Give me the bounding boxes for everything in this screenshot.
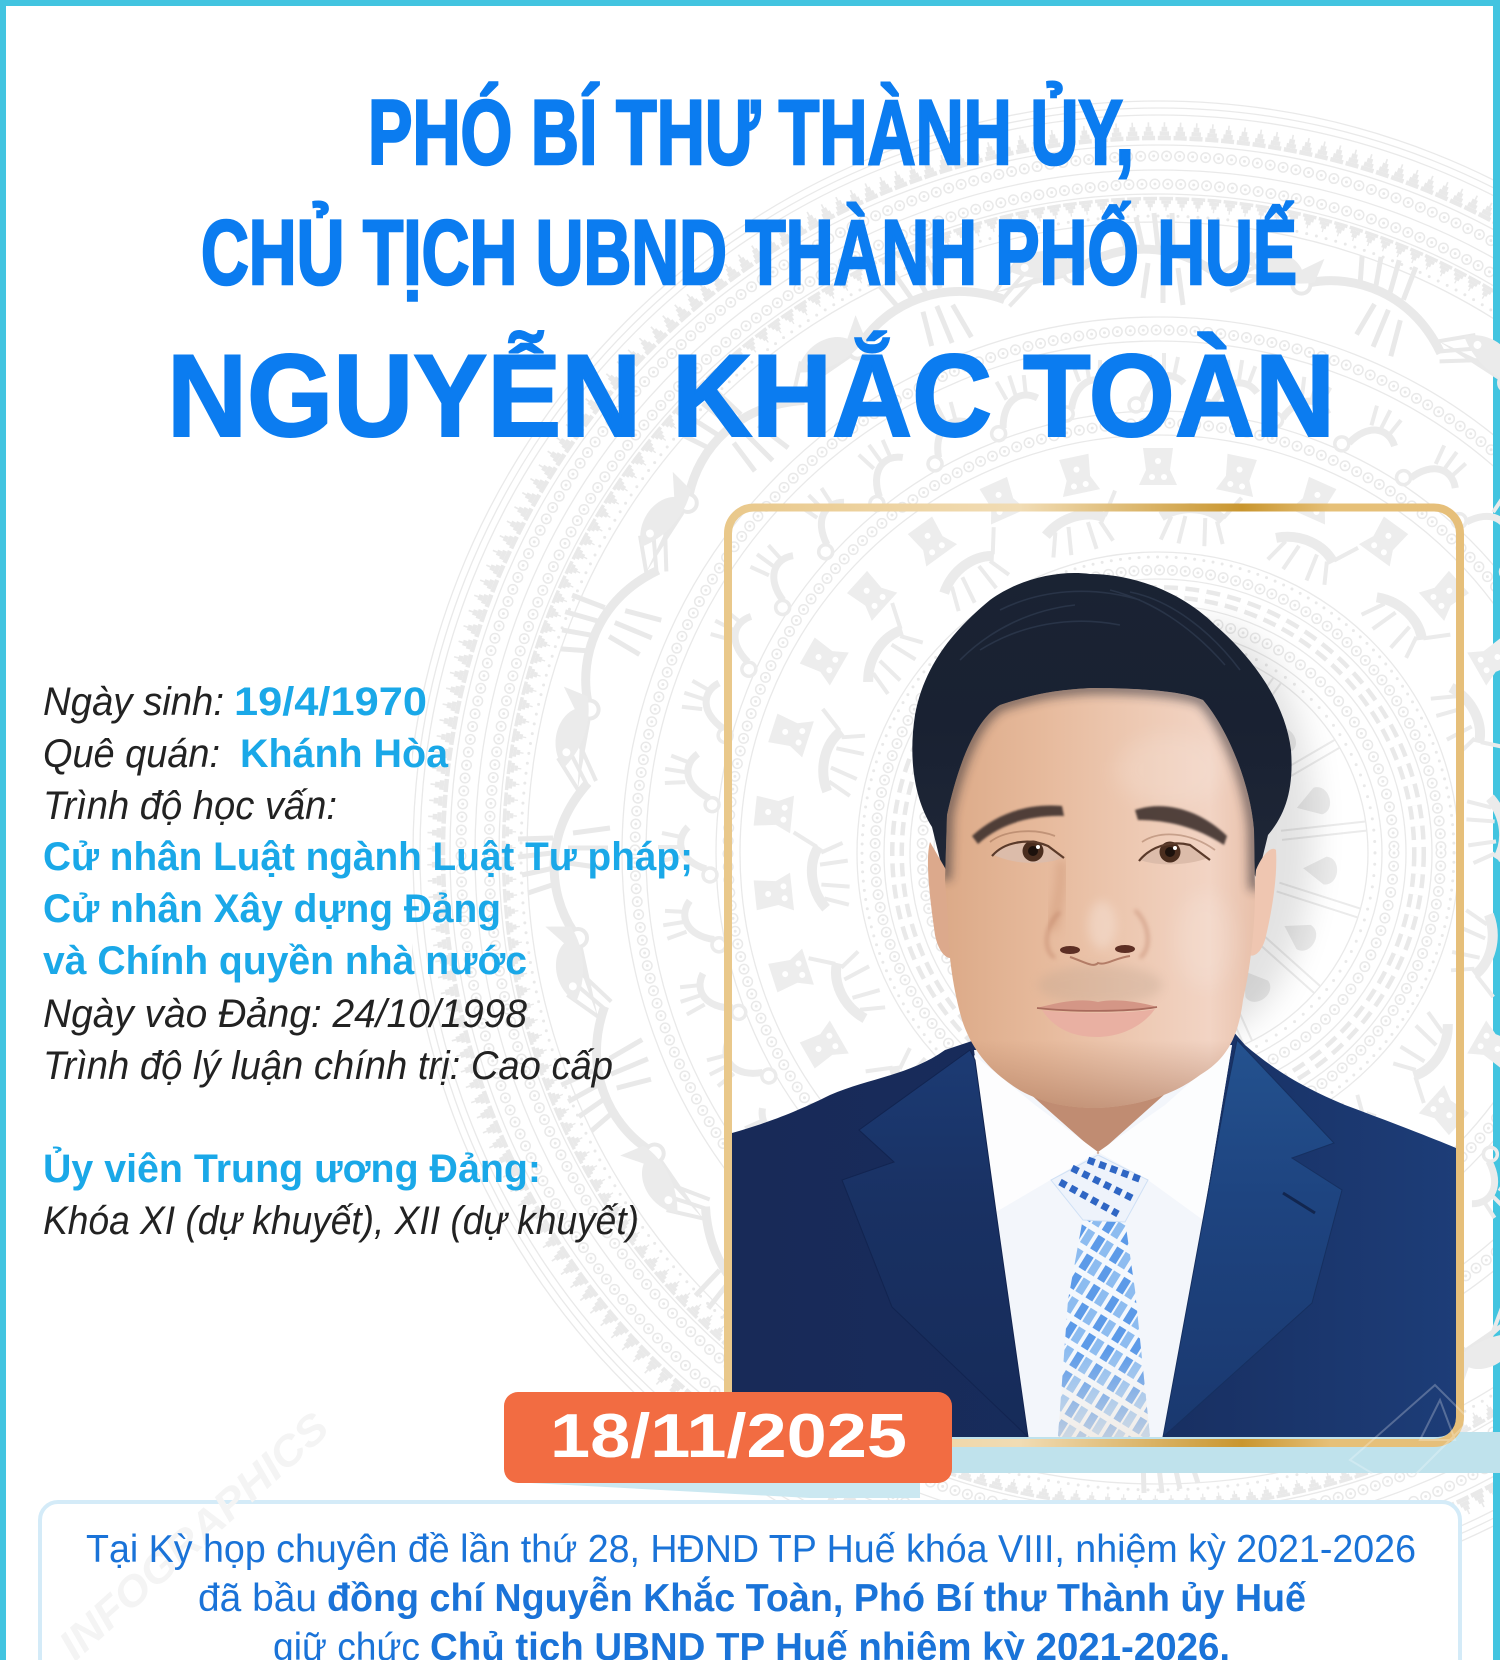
announcement line 2: đã bầu: [198, 1577, 317, 1620]
education degrees: [43, 835, 693, 983]
right lapel: [1163, 1040, 1342, 1437]
education degrees: Cử nhân Xây dựng Đảng: [43, 887, 501, 931]
left ear: [928, 842, 950, 958]
neck: [1033, 1094, 1164, 1154]
education degrees: và Chính quyền nhà nước: [43, 939, 527, 983]
right ear: [1248, 849, 1276, 956]
portrait: [732, 573, 1456, 1437]
central committee terms: Khóa XI (dự khuyết), XII (dự khuyết): [43, 1199, 639, 1243]
information box: [40, 1403, 1460, 1660]
shirt collar left: [974, 1055, 1098, 1212]
nose: [1047, 860, 1148, 965]
badge background: [504, 1392, 952, 1483]
eyebrow left: [972, 806, 1064, 844]
necktie: [1051, 1155, 1150, 1437]
shirt collar right: [1098, 1045, 1232, 1220]
central committee heading: Ủy viên Trung ương Đảng:: [43, 1145, 541, 1191]
face base: [945, 688, 1255, 1108]
title name: NGUYỄN KHẮC TOÀN: [167, 330, 1335, 461]
watermark logo lower right: [1350, 1385, 1470, 1490]
birth date: [43, 680, 427, 724]
date text: 18/11/2025: [550, 1402, 907, 1471]
party join date: Ngày vào Đảng: 24/10/1998: [43, 992, 528, 1036]
eye left: [990, 831, 1064, 863]
head shadow: [1210, 620, 1322, 1035]
shirt: [974, 1045, 1232, 1437]
mouth: [1037, 1000, 1157, 1037]
announcement line 1: Tại Kỳ họp chuyên đề lần thứ 28, HĐND TP Huế khóa VIII, nhiệm kỳ 2021-2026: [86, 1528, 1416, 1571]
hair: [912, 573, 1292, 880]
tie blade: [1058, 1218, 1150, 1437]
birth date: Ngày sinh:: [43, 680, 224, 724]
home town: Quê quán:: [43, 732, 220, 776]
biography text block: [43, 680, 693, 1243]
education label: Trình độ học vấn:: [43, 784, 337, 828]
light blue ribbon behind date: [512, 1432, 1500, 1498]
political theory level: Trình độ lý luận chính trị: Cao cấp: [43, 1044, 613, 1088]
background: bronze drum rings: [406, 101, 1500, 1605]
education degrees: Cử nhân Luật ngành Luật Tư pháp;: [43, 835, 693, 879]
eye right: [1139, 834, 1215, 864]
background: drum bird and animal motifs: [504, 199, 1500, 1507]
tie knot: [1051, 1155, 1148, 1222]
lapel buttonhole: [1283, 1193, 1315, 1213]
home town: [43, 732, 449, 776]
date badge: [504, 1392, 952, 1483]
home town: Khánh Hòa: [240, 732, 449, 776]
left lapel: [842, 1050, 1028, 1437]
title: [167, 81, 1335, 461]
gold portrait frame: [728, 508, 1460, 1443]
face: [940, 688, 1260, 1115]
birth date: 19/4/1970: [234, 680, 427, 724]
face shading: [940, 688, 1260, 1115]
eyebrow right: [1135, 806, 1227, 845]
box outline: [40, 1502, 1460, 1660]
announcement line 2: đồng chí Nguyễn Khắc Toàn, Phó Bí thư Thành ủy Huế: [327, 1576, 1306, 1620]
title line 1: PHÓ BÍ THƯ THÀNH ỦY,: [368, 81, 1134, 184]
jacket: [732, 1030, 1456, 1437]
hair highlights: [960, 590, 1240, 670]
